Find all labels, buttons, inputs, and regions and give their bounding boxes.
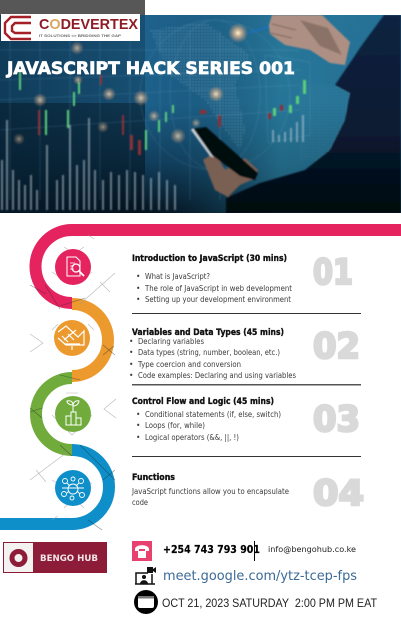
step 1 icon: document search (55, 249, 91, 285)
number 01: 01 (313, 253, 353, 293)
ribbon: green (36, 378, 72, 450)
bullet list: Loops (for, while) (145, 421, 205, 430)
step 2 icon: handshake (54, 320, 90, 356)
bullet list: Type coercion and conversion (137, 360, 241, 369)
number 02: 02 (313, 327, 360, 367)
logo wordmark: CODEVERTEX (39, 16, 138, 33)
section 2: variables (129, 328, 296, 380)
icon: telephone (132, 541, 152, 561)
step 3 icon: plant and coins (55, 396, 91, 432)
step 4 icon: network (55, 470, 91, 506)
heading: Functions (132, 473, 175, 483)
bullet list: • (136, 295, 140, 304)
hand holding pen (269, 15, 350, 65)
bullet list: • (136, 284, 140, 293)
bullet list: Code examples: Declaring and using variables (138, 371, 296, 380)
section 1: introduction (132, 254, 292, 304)
ribbon: orange (72, 304, 108, 376)
heading: Variables and Data Types (45 mins) (132, 328, 284, 338)
ribbon: blue (0, 450, 109, 524)
decorative crossing lines (30, 235, 116, 520)
heading: Introduction to JavaScript (30 mins) (132, 254, 287, 264)
logo icon (5, 17, 31, 39)
bullet list: • (136, 433, 140, 442)
event date and time: OCT 21, 2023 SATURDAY 2:00 PM PM EAT (162, 598, 377, 610)
bullet list (129, 337, 296, 380)
bullet list: • (129, 360, 133, 369)
curved timeline ribbon (0, 230, 401, 524)
phone number: +254 743 793 901 (163, 543, 260, 556)
logo mark (12, 552, 25, 564)
bullet list: • (136, 421, 140, 430)
top-left grey strip (0, 0, 145, 15)
number 03: 03 (313, 400, 360, 440)
candlesticks (19, 72, 306, 150)
bullet list: Logical operators (&&, ||, !) (145, 433, 239, 442)
ribbon: pink (36, 230, 401, 303)
bullet list: What is JavaScript? (145, 272, 210, 281)
description: JavaScript functions allow you to encapsulate (131, 487, 289, 496)
bullet list: Data types (string, number, boolean, etc.) (138, 348, 280, 357)
bullet list: • (129, 371, 133, 380)
phone hand (203, 152, 258, 197)
icon: video meeting (135, 567, 156, 584)
bar charts (1, 115, 304, 210)
pen (248, 26, 270, 34)
chart grid (0, 20, 310, 200)
Bengo Hub logo (3, 542, 107, 573)
icon: calendar (134, 590, 158, 614)
heading: Control Flow and Logic (45 mins) (132, 397, 274, 407)
hero photo: trader with phone and market charts (0, 15, 401, 213)
logo tagline: IT SOLUTIONS <> BRIDGING THE GAP (39, 33, 121, 38)
phone (193, 127, 258, 180)
bullet list: Declaring variables (138, 337, 204, 346)
logo: Codevertex (1, 14, 140, 41)
email: info@bengohub.co.ke (268, 545, 356, 554)
bullet list: Conditional statements (if, else, switch) (145, 410, 281, 419)
section 4: functions (131, 473, 289, 507)
description: code (132, 498, 148, 507)
glow lights (13, 23, 248, 145)
section 3: control flow (132, 397, 281, 442)
bullet list: • (129, 348, 133, 357)
dotted world map (150, 22, 250, 150)
bullet list: Setting up your development environment (145, 295, 291, 304)
bullet list: • (129, 337, 133, 346)
logo text: BENGO HUB (40, 554, 98, 564)
description (131, 487, 289, 507)
bullet list (136, 272, 292, 304)
number 04: 04 (313, 474, 364, 514)
bullet list (136, 410, 281, 442)
man's body (226, 15, 401, 213)
meeting link: meet.google.com/ytz-tcep-fps (163, 568, 357, 584)
title: JAVASCRIPT HACK SERIES 001 (6, 59, 295, 78)
bullet list: The role of JavaScript in web development (144, 284, 292, 293)
bullet list: • (136, 272, 140, 281)
bullet list: • (136, 410, 140, 419)
